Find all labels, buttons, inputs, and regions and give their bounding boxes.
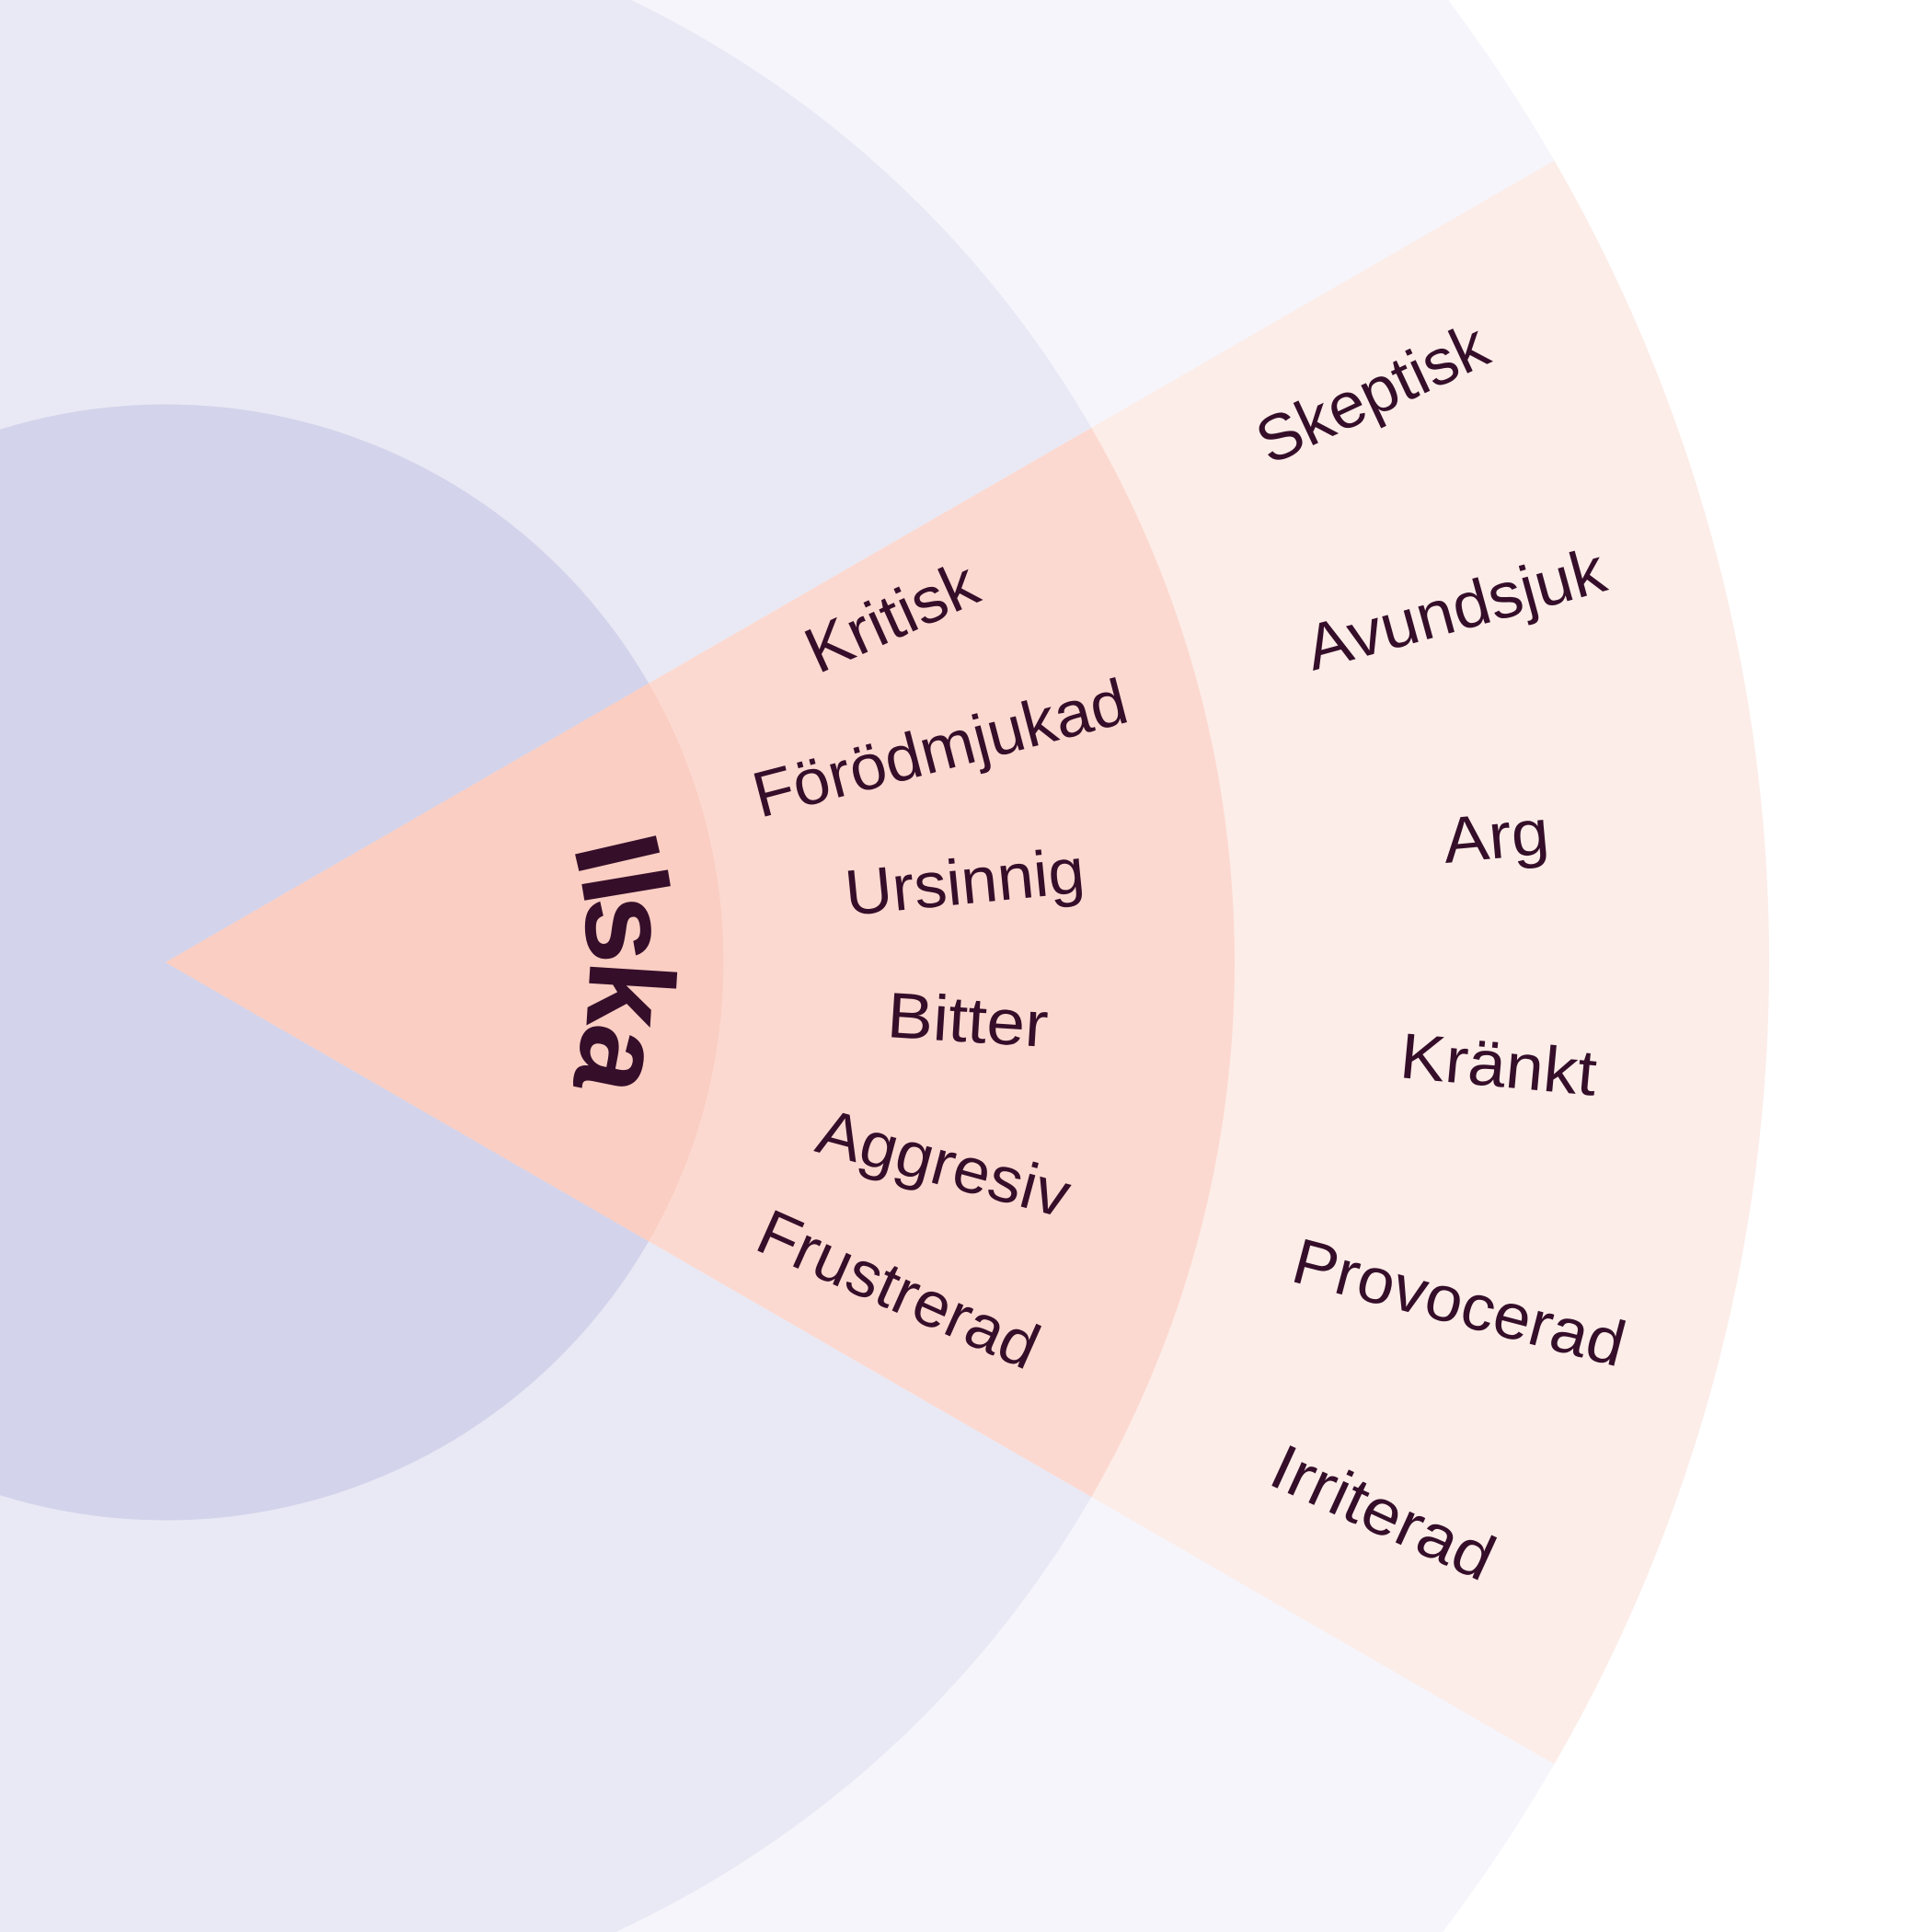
title: Ilska: a bbox=[547, 1015, 694, 1109]
word: Skeptisk: Skeptisk bbox=[1245, 308, 1500, 478]
middle ring bbox=[0, 0, 1235, 1932]
word: Kränkt: Kränkt bbox=[1397, 1019, 1600, 1110]
middle band words bbox=[745, 546, 1134, 1383]
sector: inner band bbox=[166, 684, 723, 1241]
outer band words bbox=[1245, 308, 1633, 1594]
inner circle bbox=[0, 405, 723, 1520]
word: Provocerad: Provocerad bbox=[1285, 1225, 1633, 1380]
sector: outer band bbox=[166, 160, 1769, 1765]
title: Ilska: s bbox=[558, 891, 698, 967]
word: Avundsjuk: Avundsjuk bbox=[1297, 534, 1614, 684]
word: Arg: Arg bbox=[1440, 796, 1552, 877]
sector: middle band bbox=[166, 428, 1235, 1497]
word: Frustrerad: Frustrerad bbox=[747, 1195, 1050, 1383]
word: Förödmjukad: Förödmjukad bbox=[745, 665, 1134, 832]
title: Ilska: I bbox=[548, 822, 687, 885]
word: Kritisk: Kritisk bbox=[794, 546, 990, 687]
title: Ilska: k bbox=[560, 957, 700, 1032]
word: Irriterad: Irriterad bbox=[1260, 1431, 1506, 1594]
title: Ilska: l bbox=[555, 857, 694, 914]
word: Ursinnig: Ursinnig bbox=[842, 834, 1087, 929]
title: Ilska bbox=[547, 822, 700, 1109]
word: Bitter: Bitter bbox=[885, 979, 1051, 1061]
word: Aggresiv: Aggresiv bbox=[810, 1095, 1078, 1231]
